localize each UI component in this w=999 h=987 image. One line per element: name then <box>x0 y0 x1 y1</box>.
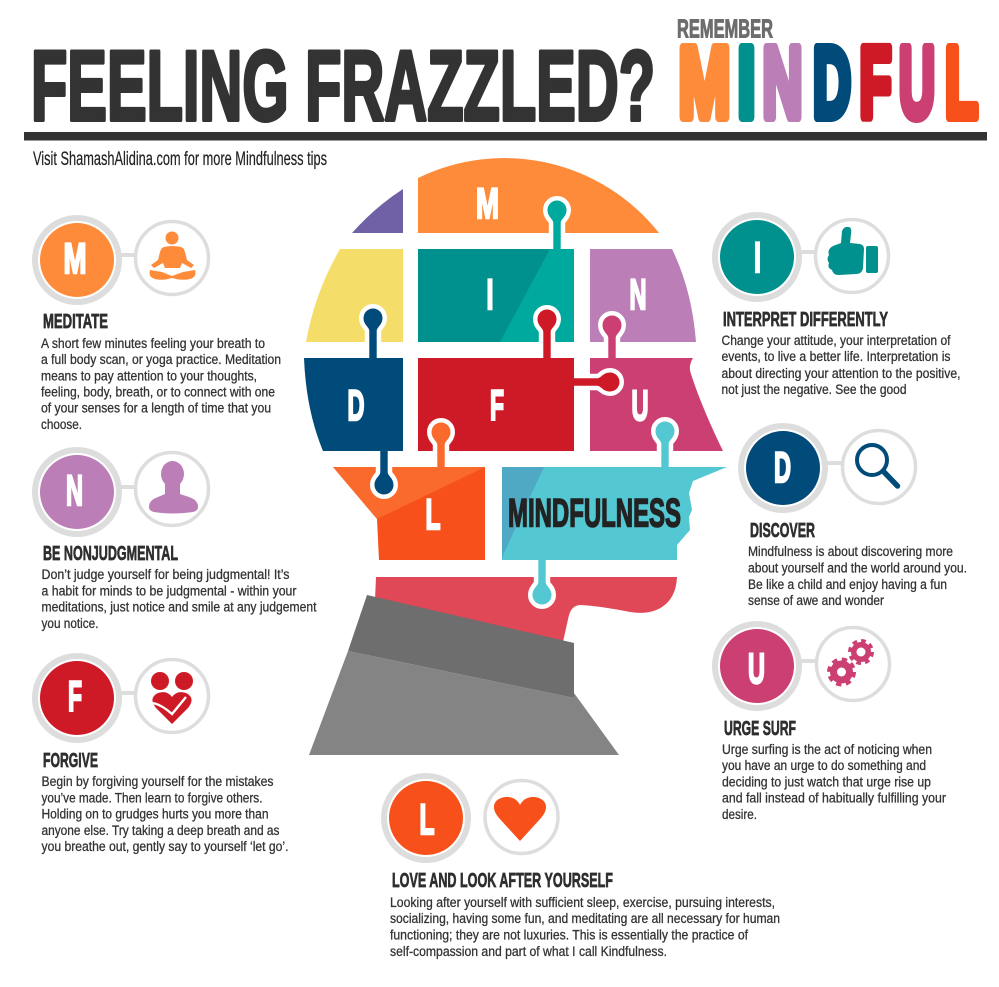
icon: two people and heart <box>136 660 208 732</box>
piece: D <box>304 358 403 451</box>
icon: heart <box>485 780 558 854</box>
head letters: M <box>476 180 499 228</box>
body text: Change your attitude, your interpretation of <box>722 333 951 348</box>
key: pink <box>602 316 622 358</box>
wordmark: mindful: F <box>860 27 892 139</box>
key: navy lower <box>374 451 394 494</box>
wordmark: mindful: U <box>899 27 935 139</box>
body text: means to pay attention to your thoughts, <box>41 368 257 384</box>
body text: not just the negative. See the good <box>722 382 906 397</box>
header rule <box>24 132 987 140</box>
badge I <box>715 215 818 299</box>
wordmark: mindful: I <box>738 27 756 139</box>
head label: MINDFULNESS <box>508 492 681 536</box>
website line: Visit ShamashAlidina.com for more Mindfulness tips <box>33 149 327 170</box>
collar <box>348 595 574 698</box>
piece: M <box>418 158 659 233</box>
badge D: D <box>774 444 791 492</box>
wordmark: mindful: M <box>678 27 730 139</box>
body text: functioning; they are not luxuries. This is essentially the practice of <box>390 928 748 942</box>
head illustration <box>304 158 727 755</box>
body text: Urge surfing is the act of noticing when <box>722 742 932 757</box>
body text: A short few minutes feeling your breath to <box>41 336 265 351</box>
piece: N <box>590 249 696 342</box>
heading: FORGIVE <box>43 749 98 772</box>
badge N <box>35 450 138 534</box>
badge D <box>741 426 844 510</box>
wordmark: mindful <box>678 27 978 139</box>
body text: Begin by forgiving yourself for the mistakes <box>42 774 274 789</box>
piece: violet <box>352 189 403 233</box>
badge N: N <box>66 467 83 515</box>
panel: forgive <box>35 656 288 854</box>
badge F <box>35 656 138 740</box>
body text: Holding on to grudges hurts you more than <box>42 806 268 822</box>
wordmark: mindful: N <box>762 27 802 139</box>
body text: you breathe out, gently say to yourself ‘let go’. <box>42 839 288 854</box>
badge L <box>384 776 468 860</box>
badge I: I <box>754 234 761 282</box>
head letters: L <box>426 491 440 539</box>
body text <box>722 333 960 397</box>
head letters: F <box>490 382 504 430</box>
key: navy <box>364 308 382 358</box>
badge U: U <box>748 645 765 693</box>
body text: Looking after yourself with sufficient sleep, exercise, pursuing interests, <box>390 895 775 910</box>
shoulders <box>309 651 619 755</box>
badge M: M <box>64 235 86 283</box>
subtitle: remember: REMEMBER <box>677 14 773 44</box>
body text: you have an urge to do something and <box>722 758 926 773</box>
body text: self-compassion and part of what I call Kindfulness. <box>390 944 667 959</box>
body text: of your senses for a length of time that you <box>41 400 271 416</box>
body text: you’ve made. Then learn to forgive others. <box>42 790 262 806</box>
body text: socializing, having some fun, and meditating are all necessary for human <box>390 911 780 926</box>
head letters: N <box>630 271 646 319</box>
icon: person <box>136 452 208 526</box>
head letters: U <box>632 382 648 430</box>
panel: urge surf <box>715 624 946 822</box>
key: red right <box>574 372 620 392</box>
head letters <box>348 180 648 539</box>
panel: discover <box>741 426 967 608</box>
body text: Mindfulness is about discovering more <box>748 544 953 559</box>
heading: INTERPRET DIFFERENTLY <box>723 308 888 331</box>
heading: DISCOVER <box>750 519 815 542</box>
wordmark: mindful: D <box>813 27 851 139</box>
body text: events, to live a better life. Interpretation is <box>722 349 951 364</box>
body text <box>41 336 281 432</box>
piece: yellow <box>306 249 403 342</box>
piece: face <box>502 467 727 560</box>
icon: meditating figure <box>136 222 208 294</box>
piece: I <box>418 249 574 342</box>
key: red up <box>538 310 556 358</box>
body text: a full body scan, or yoga practice. Meditation <box>41 352 281 367</box>
body text: Be like a child and enjoy having a fun <box>748 577 947 592</box>
icon: magnifier <box>842 430 916 504</box>
heading: MEDITATE <box>43 310 108 333</box>
heading: LOVE AND LOOK AFTER YOURSELF <box>392 869 613 892</box>
body text: sense of awe and wonder <box>748 593 884 608</box>
piece: F <box>418 358 574 451</box>
body text <box>748 544 967 608</box>
body text: anyone else. Try taking a deep breath and as <box>42 823 280 838</box>
badge U <box>715 624 818 708</box>
panel: interpret differently <box>715 215 960 397</box>
body text: Don’t judge yourself for being judgmental! It’s <box>42 567 290 582</box>
panel: love and look after yourself <box>384 776 780 959</box>
body text <box>42 774 288 854</box>
body text: choose. <box>41 417 82 432</box>
icon: gears <box>816 628 890 700</box>
head letters: D <box>348 382 364 430</box>
badge L: L <box>420 796 434 844</box>
key: orange <box>432 422 450 467</box>
badge M <box>35 218 138 302</box>
heading: URGE SURF <box>724 717 796 740</box>
body text <box>722 742 946 822</box>
piece: U <box>590 358 723 451</box>
icon: thumbs up <box>816 220 888 292</box>
body text <box>390 895 780 959</box>
body text: a habit for minds to be judgmental - within your <box>42 584 297 598</box>
body text <box>42 567 317 631</box>
badge F: F <box>68 673 82 721</box>
body text: about yourself and the world around you. <box>748 560 967 576</box>
key: teal <box>548 200 566 249</box>
heading: BE NONJUDGMENTAL <box>43 542 178 565</box>
body text: and fall instead of habitually fulfilling your <box>722 790 946 806</box>
piece: neck <box>375 577 677 642</box>
panel: be nonjudgmental <box>35 450 317 631</box>
body text: you notice. <box>42 616 98 631</box>
body text: meditations, just notice and smile at any judgement <box>42 600 317 614</box>
body text: desire. <box>722 807 757 822</box>
panel: meditate <box>35 218 281 432</box>
body text: about directing your attention to the positive, <box>722 366 960 381</box>
key: cyan upper <box>656 422 674 467</box>
key: cyan lower <box>532 560 552 604</box>
body text: deciding to just watch that urge rise up <box>722 774 931 790</box>
head letters: I <box>486 271 494 319</box>
piece: L <box>333 467 485 560</box>
body text: feeling, body, breath, or to connect with one <box>41 384 275 400</box>
